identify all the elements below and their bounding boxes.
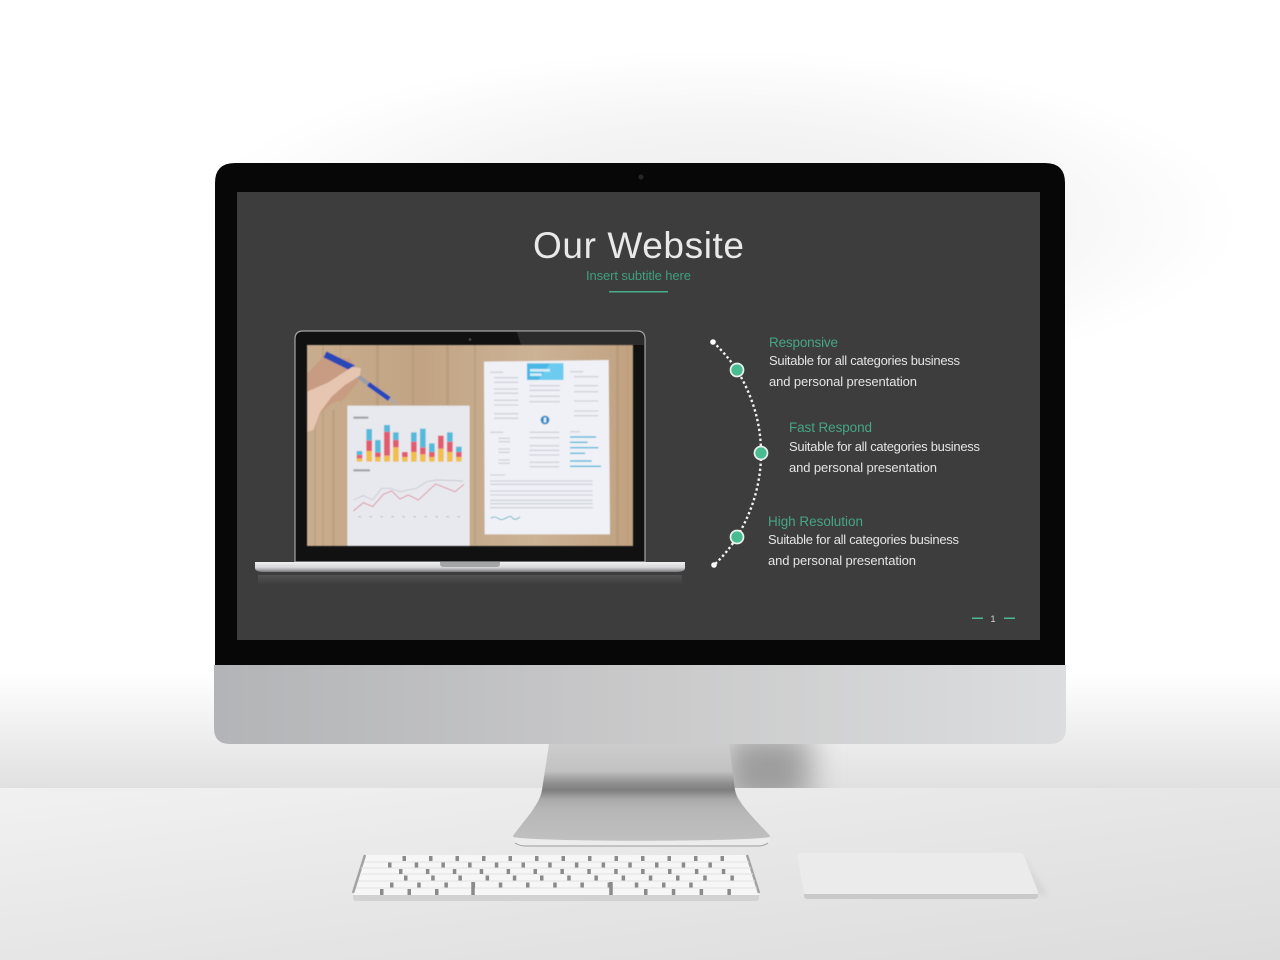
page number: 1 [990, 614, 996, 624]
keyboard [353, 855, 759, 901]
trackpad [797, 853, 1048, 899]
item: High Resolution [768, 514, 960, 568]
laptop lid [295, 331, 645, 562]
node 2 [754, 446, 768, 460]
item description: and personal presentation [769, 374, 917, 389]
monitor [214, 163, 1066, 744]
title: Our Website [533, 225, 744, 266]
laptop notch [440, 562, 500, 567]
laptop screen photo [307, 345, 633, 546]
monitor stand [513, 744, 770, 846]
hand [307, 357, 362, 432]
arc end dot top [710, 339, 716, 345]
chart paper [347, 406, 470, 546]
laptop reflection [258, 575, 682, 585]
thumb [307, 367, 361, 432]
item heading: Responsive [769, 335, 838, 350]
background: desk [0, 788, 1280, 960]
node 3 [730, 530, 744, 544]
item heading: Fast Respond [789, 420, 872, 435]
webcam [638, 174, 644, 180]
monitor bezel [215, 163, 1065, 665]
item description: and personal presentation [768, 553, 916, 568]
item description: Suitable for all categories business [789, 439, 980, 454]
page number [972, 614, 1015, 624]
arc end dot bottom [711, 562, 717, 568]
item heading: High Resolution [768, 514, 863, 529]
dotted arc timeline [710, 339, 768, 568]
item description: and personal presentation [789, 460, 937, 475]
laptop mockup [255, 331, 685, 585]
laptop camera [468, 338, 472, 341]
item description: Suitable for all categories business [769, 353, 960, 368]
subtitle: Insert subtitle here [586, 268, 691, 283]
item: Responsive [769, 335, 960, 389]
node 1 [730, 364, 744, 376]
item: Fast Respond [789, 420, 980, 475]
slide panel [237, 192, 1040, 640]
monitor chin [214, 665, 1066, 744]
item description: Suitable for all categories business [768, 532, 960, 547]
title underline [609, 291, 668, 292]
laptop base [255, 562, 685, 572]
lid reflection [517, 332, 644, 345]
resume paper [484, 360, 610, 534]
chart paper and resume, drawn at 3x [307, 354, 610, 546]
pen [325, 354, 397, 404]
